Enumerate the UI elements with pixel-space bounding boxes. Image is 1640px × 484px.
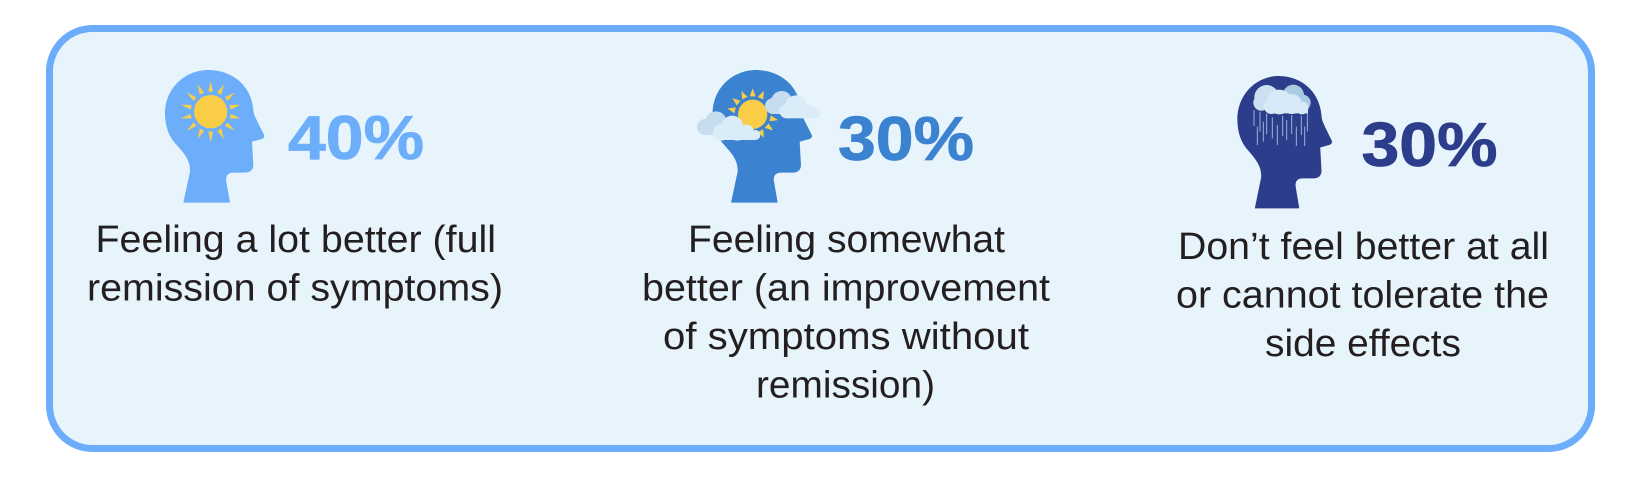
cloud (1253, 85, 1311, 114)
column: 30% feeling somewhat better (642, 70, 1050, 406)
description: don't feel better: Don’t feel better at all (1178, 226, 1549, 268)
stat: 40%: 40% (288, 104, 424, 173)
description: feeling somewhat better: Feeling somewhat (688, 219, 1005, 261)
stat: 30%: 30% (1362, 111, 1498, 180)
stat: 30%: 30% (838, 105, 974, 174)
left cloud (697, 111, 760, 141)
description: feeling a lot better: remission of symptoms) (87, 268, 503, 310)
description: feeling somewhat better: remission) (756, 364, 935, 406)
description: don't feel better: side effects (1265, 323, 1461, 365)
icon: head with sun and clouds (697, 70, 821, 203)
description: feeling somewhat better: of symptoms without (663, 316, 1029, 358)
rain (1254, 110, 1307, 146)
description: don't feel better: or cannot tolerate the (1176, 274, 1549, 316)
column: 40% feeling a lot better (87, 70, 503, 309)
icon: head with sun (165, 70, 264, 203)
right cloud (765, 91, 821, 118)
column: 30% don't feel better (1176, 76, 1549, 365)
description: feeling a lot better (87, 219, 503, 310)
icon: head with rain cloud (1237, 76, 1332, 208)
description: don't feel better (1176, 226, 1549, 365)
description: feeling somewhat better: better (an improvement (642, 268, 1050, 310)
description: feeling a lot better: Feeling a lot better (full (96, 219, 496, 261)
description: feeling somewhat better (642, 219, 1050, 406)
